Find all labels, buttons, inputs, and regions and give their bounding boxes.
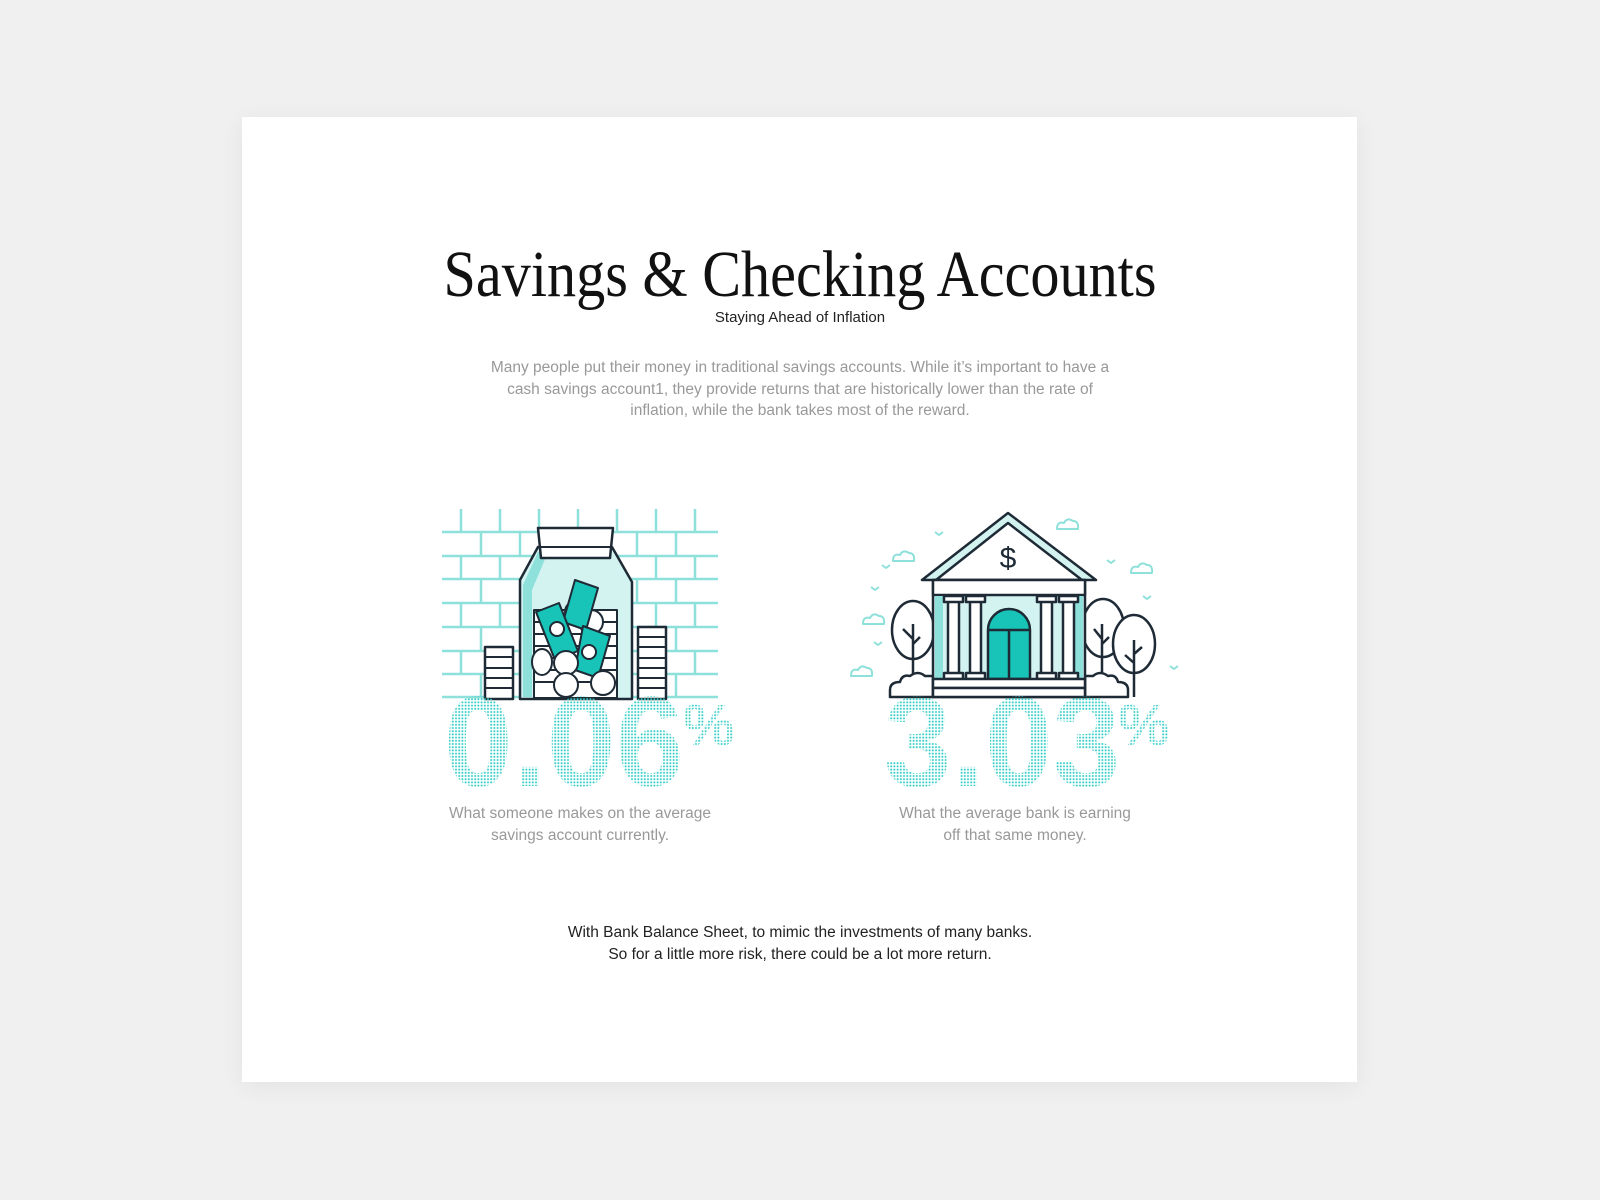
closing text: [568, 924, 1032, 963]
closing text: So for a little more risk, there could be a lot more return.: [608, 946, 992, 963]
subtitle: Staying Ahead of Inflation: [715, 309, 885, 326]
number: 3.03%: 3.03: [884, 671, 1120, 814]
closing text: With Bank Balance Sheet, to mimic the investments of many banks.: [568, 924, 1032, 941]
title: Savings & Checking Accounts: [444, 238, 1156, 311]
icon: jar on brick wall: [442, 509, 718, 699]
caption: right: What the average bank is earning off that same money.: [899, 805, 1131, 844]
caption: left: What someone makes on the average savings account currently.: [449, 805, 711, 844]
intro paragraph: Many people put their money in traditional savings accounts. While it’s important to have a cash savings account1, they provide returns that are historically lower than the rate of inflation, while the bank takes most of the reward.: [491, 359, 1109, 419]
number: 0.06%: 0.06: [444, 671, 684, 814]
card panel: [242, 117, 1357, 1082]
number: 0.06%: %: [683, 693, 735, 758]
number: 3.03%: %: [1118, 693, 1170, 758]
icon: bank building: [851, 513, 1178, 697]
icon: bank building: $: [1000, 542, 1017, 575]
